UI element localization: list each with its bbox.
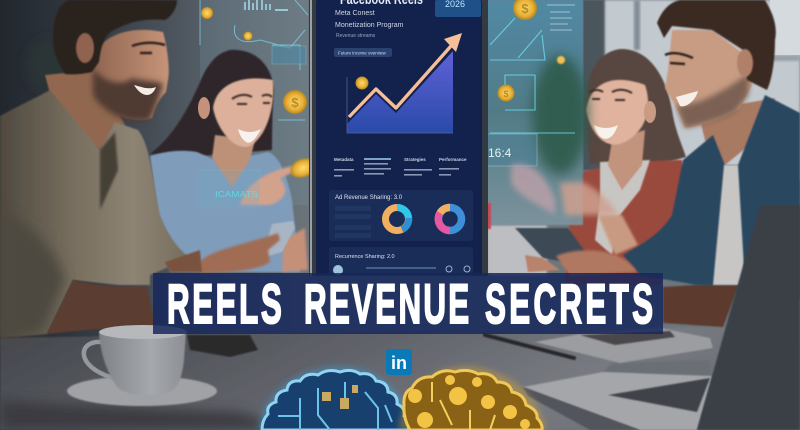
woman's red cardigan (565, 160, 685, 285)
floating coin dollar: $ (291, 95, 299, 110)
chart area (347, 51, 453, 133)
hologram panels on the left (200, 0, 308, 120)
man's forearm (663, 282, 740, 327)
smartphone on table (187, 335, 258, 357)
data panel: 16:4 (488, 146, 512, 160)
table (0, 326, 800, 430)
man's shirt (0, 90, 190, 338)
second revenue card: Recurrence Sharing: 2.0 (335, 254, 395, 260)
caption: Revenue streams (336, 33, 376, 39)
plant behind glass (532, 55, 588, 175)
pink accent (483, 203, 491, 229)
man's forearm (47, 280, 155, 334)
foreground hologram on the left (198, 90, 318, 208)
donut chart right (438, 207, 462, 231)
info rows (334, 157, 467, 177)
circuit lines (200, 0, 308, 120)
person: man on the left (0, 0, 280, 338)
man's placket (100, 132, 118, 210)
phone frame highlight (310, 0, 312, 276)
man's ear (76, 33, 94, 63)
floating coin right mid (498, 84, 514, 102)
hologram tile (272, 46, 306, 64)
gold brain nodes (408, 375, 530, 429)
man's ear (737, 49, 753, 77)
laptop lid (697, 205, 800, 430)
woman's pointing hand (240, 166, 294, 205)
glowing node (557, 56, 565, 64)
phone held by woman (262, 221, 295, 258)
title word three: SECRETS (485, 272, 653, 335)
chart trend arrow (349, 46, 451, 117)
pill label (334, 48, 392, 57)
phone screen (316, 0, 482, 275)
laptop keyboard (608, 378, 710, 412)
man's hand (198, 233, 280, 273)
chart axis (347, 77, 453, 133)
icon: linkedin (386, 349, 412, 375)
tablet with hands (515, 228, 637, 276)
man's hair (53, 0, 177, 74)
floating coin small (244, 32, 252, 40)
woman's smile (238, 129, 261, 143)
pink glass hand one (511, 164, 555, 215)
saucer (67, 376, 217, 406)
man's face (92, 30, 169, 120)
title word two: REVENUE (304, 272, 469, 335)
laptop base (523, 372, 712, 430)
man's smile (676, 91, 698, 106)
donut chart left (386, 207, 409, 230)
tablet (515, 228, 597, 268)
bar readout (245, 0, 288, 10)
woman's face (586, 80, 648, 145)
right glass top list (547, 5, 575, 30)
gold brain glow (399, 366, 546, 430)
year badge (435, 0, 481, 17)
woman's hair (586, 49, 686, 170)
pill label: Future income overview (338, 50, 387, 56)
chart coin (356, 76, 368, 90)
info rows: Strategies (404, 157, 426, 162)
person: man on the right (623, 0, 800, 327)
man's hair (657, 0, 776, 90)
pink glass hand two (560, 182, 618, 215)
right hand (556, 250, 637, 276)
woman's hair (150, 50, 274, 156)
woman's brows and eyes (589, 90, 632, 100)
gold brain shape (404, 370, 542, 430)
man's shirt sleeve shading (0, 210, 65, 338)
laptop table shade (603, 360, 710, 382)
person: woman on the right (565, 49, 686, 285)
icon: linkedin: in (391, 353, 407, 373)
woman's ear (644, 101, 656, 123)
chart arrow head (444, 33, 462, 52)
brain: gold circuit (399, 366, 546, 430)
notebook page (580, 331, 675, 345)
laptop front edge (523, 387, 640, 430)
man's denim jacket (623, 95, 800, 300)
notebook (535, 328, 713, 363)
hologram cyan text: ICAMATS (215, 190, 258, 199)
coffee cup and saucer (67, 325, 217, 406)
woman's neck and chest (212, 135, 255, 187)
floating coin top (201, 7, 213, 19)
floating coin right top: $ (521, 1, 529, 16)
woman's face (213, 78, 273, 147)
man's neck (700, 98, 775, 165)
man's white tee (713, 165, 745, 285)
man's brow and eye (132, 43, 165, 53)
man's beard (93, 68, 163, 121)
gold brain traces (432, 382, 495, 430)
subtitle line one: Meta Conest (335, 10, 375, 17)
lower hologram frame (198, 170, 260, 208)
pen (485, 335, 574, 358)
title word one: REELS (167, 272, 282, 335)
blue brain circuits (278, 382, 392, 430)
woman's light top (595, 160, 650, 255)
info rows: Metadata (334, 157, 354, 162)
woman's other hand (282, 228, 308, 272)
subtitle line two: Monetization Program (335, 22, 404, 29)
man's brow and eye (665, 53, 693, 64)
floating coin right mid: $ (503, 89, 509, 99)
person: woman on the left (150, 50, 308, 272)
giant phone dashboard (309, 0, 488, 276)
blue brain chips (322, 385, 358, 409)
man's smile (134, 85, 156, 95)
cup body (99, 332, 186, 395)
right glass panel (487, 0, 583, 225)
phone body (309, 0, 488, 276)
man's face (665, 30, 752, 128)
table shadow (0, 400, 290, 430)
woman's brows and eyes (232, 95, 272, 104)
data panel (481, 134, 537, 166)
title banner (153, 272, 663, 335)
notebook and pen on table (485, 328, 713, 363)
man's stubble (676, 72, 750, 128)
cup rim (99, 325, 187, 339)
cup handle (84, 342, 113, 378)
woman's raised forearm (598, 215, 638, 255)
woman's smile (594, 125, 618, 139)
info rows: Performance (439, 157, 467, 162)
ad revenue card: Ad Revenue Sharing: 3.0 (335, 195, 403, 201)
woman's denim shirt (150, 151, 300, 272)
woman's neck (608, 130, 645, 190)
banner background (153, 273, 663, 334)
man's wrist (165, 250, 202, 272)
left hand (525, 255, 560, 272)
hologram panel on the right (481, 0, 618, 229)
area line chart (347, 33, 462, 133)
blue brain glow (258, 366, 412, 430)
ad revenue card (329, 190, 473, 241)
blue brain shape (262, 370, 408, 430)
laptop on the right (523, 205, 800, 430)
man's neck (45, 70, 125, 150)
coin at fingertip (288, 155, 318, 181)
brain: blue circuit (258, 366, 412, 430)
woman's ear (198, 97, 210, 119)
floating coin right top (513, 0, 537, 20)
second revenue card (329, 247, 473, 275)
circuit lines right (490, 18, 575, 133)
